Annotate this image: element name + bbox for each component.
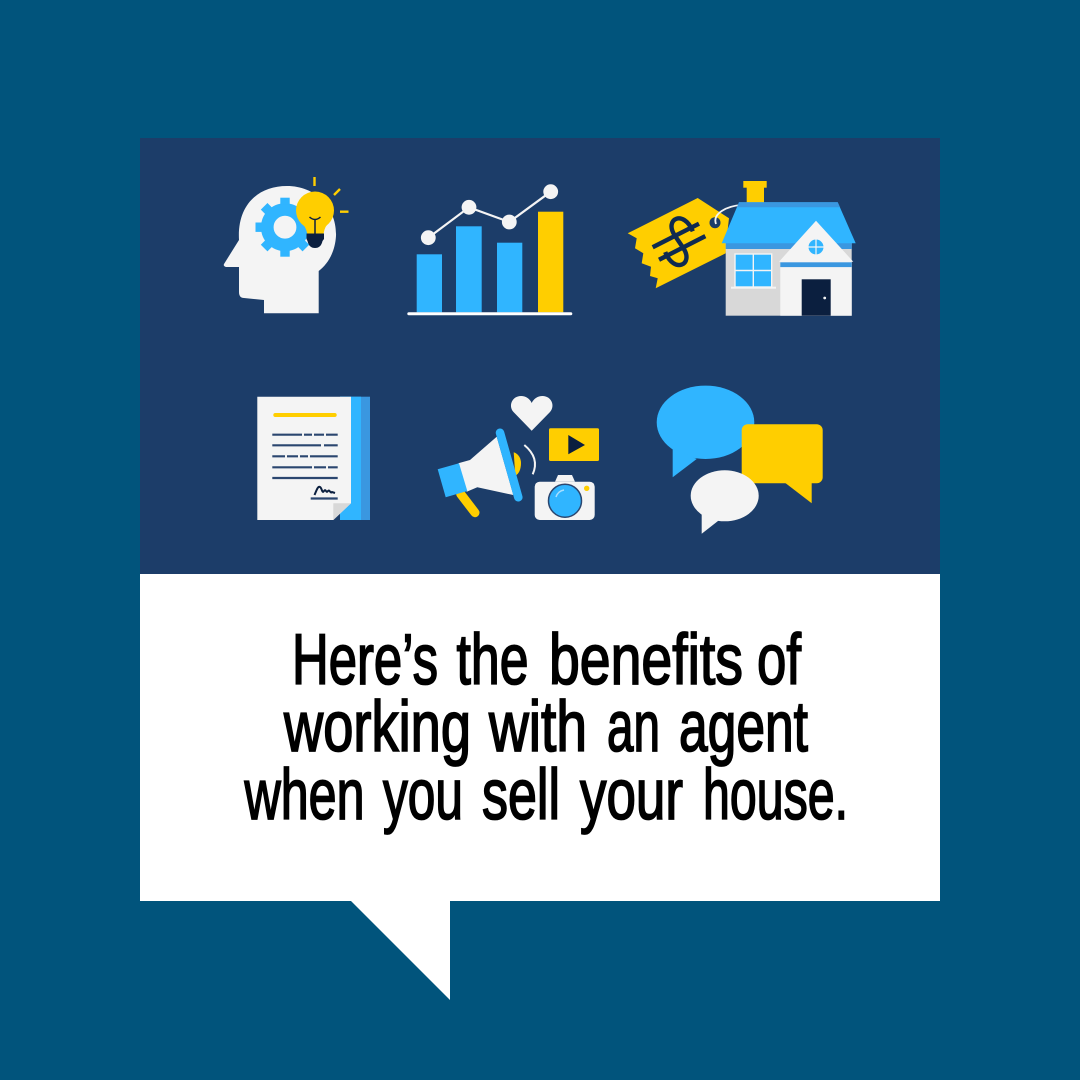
heading text: Here’s: [292, 621, 438, 700]
icon: bar chart with trend line: [407, 184, 572, 315]
heading text: with: [488, 688, 587, 767]
heading text: the: [456, 621, 528, 700]
icon: speech bubbles: [657, 386, 823, 534]
heading text: sell: [482, 756, 560, 835]
icon: head with gear and light bulb: [224, 177, 348, 313]
heading text: when: [244, 756, 364, 835]
heading text: [244, 621, 848, 835]
heading text: benefits: [549, 621, 743, 700]
heading text: your: [580, 756, 683, 835]
heading text: house.: [703, 756, 848, 835]
icon: megaphone with social media: [438, 396, 599, 520]
heading text: you: [383, 756, 463, 835]
heading text: an: [607, 688, 660, 767]
heading text: agent: [679, 688, 808, 767]
heading text: working: [283, 688, 471, 767]
heading text: of: [757, 621, 801, 700]
panel: icon grid: [140, 138, 940, 574]
icon: signed contract document: [257, 397, 370, 520]
icon: house with price tag: [628, 181, 856, 316]
speech bubble caption panel: [140, 574, 940, 1000]
